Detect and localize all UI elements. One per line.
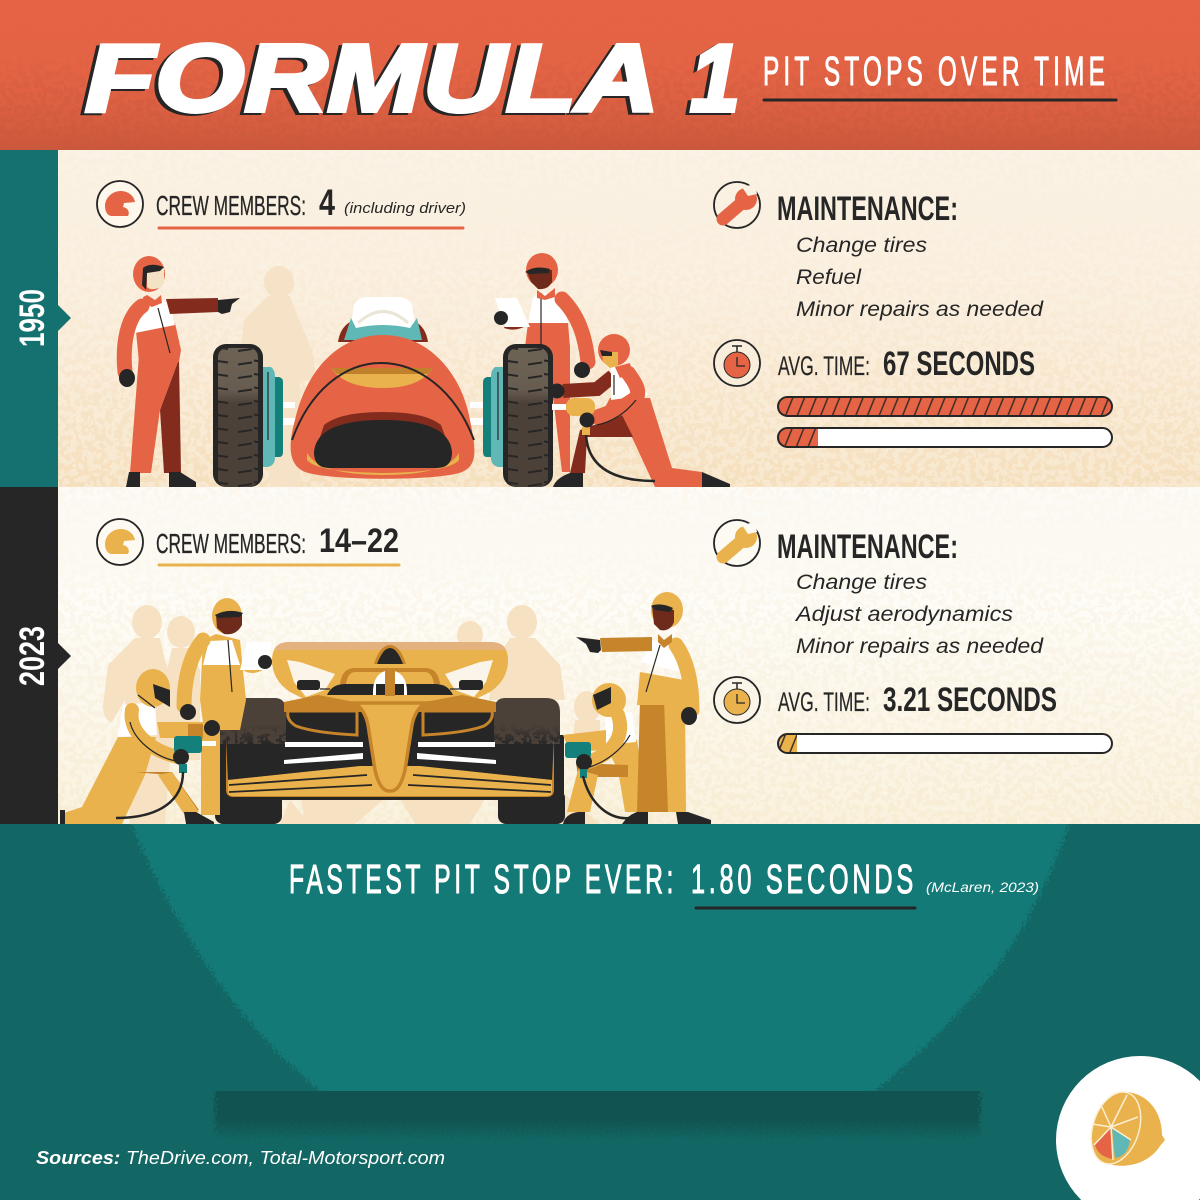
year tab: 2023: 2023 [13, 626, 52, 686]
year tab: 1950: 1950 [13, 289, 52, 347]
title: FORMULA 1: FORMULA [85, 25, 659, 132]
icon: stopwatch [714, 340, 760, 386]
wheel hubs [263, 367, 275, 467]
crew members line 1950: (including driver) [344, 200, 466, 217]
air intake [307, 453, 459, 475]
title: FORMULA 1: 1 [686, 27, 736, 134]
icon: stopwatch [714, 677, 760, 723]
front wing [226, 738, 554, 797]
bar: 2023 time comparison [778, 428, 1112, 447]
maintenance 1950 [714, 182, 1044, 321]
wheel left [213, 344, 263, 487]
ghost crew silhouettes 2023 [103, 605, 600, 824]
header banner [0, 0, 1200, 150]
maintenance 1950: Change tires [796, 234, 928, 257]
spotlight [126, 810, 1074, 1105]
maintenance 2023: MAINTENANCE: [777, 528, 958, 566]
axles [283, 402, 483, 425]
windshield [338, 322, 428, 342]
nose body [291, 335, 474, 479]
average time 1950: AVG. TIME: [778, 351, 870, 381]
lower wheels [215, 790, 282, 824]
upper wheels [220, 698, 286, 745]
crew members line 2023: 14–22 [319, 522, 399, 560]
panel: fastest pit stop [0, 810, 1200, 1200]
bar: 2023 time [778, 734, 1112, 753]
bonnet panel [331, 368, 433, 388]
year tab: 2023 [0, 487, 71, 824]
fastest pit stop text: FASTEST PIT STOP EVER: [289, 856, 677, 902]
crew member pointing 2023 [576, 592, 711, 824]
main body dark [216, 735, 564, 800]
ghost crew member 1950 [238, 266, 316, 487]
white stripes [284, 742, 496, 764]
crew member with clipboard 1950 [494, 253, 590, 472]
icon: wrench [714, 182, 760, 228]
maintenance 1950: MAINTENANCE: [777, 190, 958, 228]
side intakes [288, 711, 357, 735]
maintenance 1950: Minor repairs as needed [796, 298, 1044, 321]
crew members line 1950 [97, 181, 466, 228]
sources: Sources: TheDrive.com, Total-Motorsport.com [36, 1148, 445, 1168]
panel: 2023 [0, 487, 1200, 824]
average time 2023: 3.21 SECONDS [883, 681, 1057, 719]
average time 1950 [714, 340, 1112, 447]
crew members line 1950: 4 [319, 182, 335, 223]
nose [355, 703, 425, 791]
crew member with clipboard 2023 [180, 598, 272, 815]
title: FORMULA 1: 1 [690, 25, 740, 132]
title: FORMULA 1: FORMULA [81, 27, 655, 134]
maintenance 2023: Minor repairs as needed [796, 635, 1044, 658]
mirrors [297, 680, 320, 690]
rear wing [272, 642, 508, 702]
car 1950 [213, 297, 553, 487]
crew member pointing 1950 [119, 256, 240, 487]
average time 2023: AVG. TIME: [778, 687, 870, 717]
crew members line 2023 [97, 519, 399, 565]
maintenance 2023 [714, 520, 1044, 658]
average time 1950: 67 SECONDS [883, 345, 1035, 383]
fastest pit stop text: 1.80 SECONDS [691, 856, 917, 902]
maintenance 1950: Refuel [796, 266, 862, 289]
crew members line 1950: CREW MEMBERS: [156, 190, 306, 221]
average time 2023 [714, 677, 1112, 753]
maintenance 2023: Adjust aerodynamics [794, 603, 1014, 626]
kneeling crew member left 2023 [60, 669, 220, 824]
crew members line 2023: CREW MEMBERS: [156, 528, 306, 559]
kneeling crew member with wrench 1950 [550, 334, 730, 487]
bar: 1950 time [778, 397, 1112, 416]
airbox [374, 645, 406, 664]
roll hoop and driver [340, 668, 440, 684]
icon: lemon [1083, 1086, 1165, 1170]
panel: 1950 [0, 150, 1200, 487]
maintenance 2023: Change tires [796, 571, 928, 594]
icon: wrench [714, 520, 760, 566]
kneeling crew member right 2023 [563, 683, 648, 824]
logo [1056, 1056, 1200, 1200]
fastest pit stop text: (McLaren, 2023) [926, 879, 1039, 895]
year tab: 1950 [0, 150, 71, 487]
car 2023 [215, 642, 565, 824]
ground shadow [210, 1091, 984, 1137]
wheel right [503, 344, 553, 487]
